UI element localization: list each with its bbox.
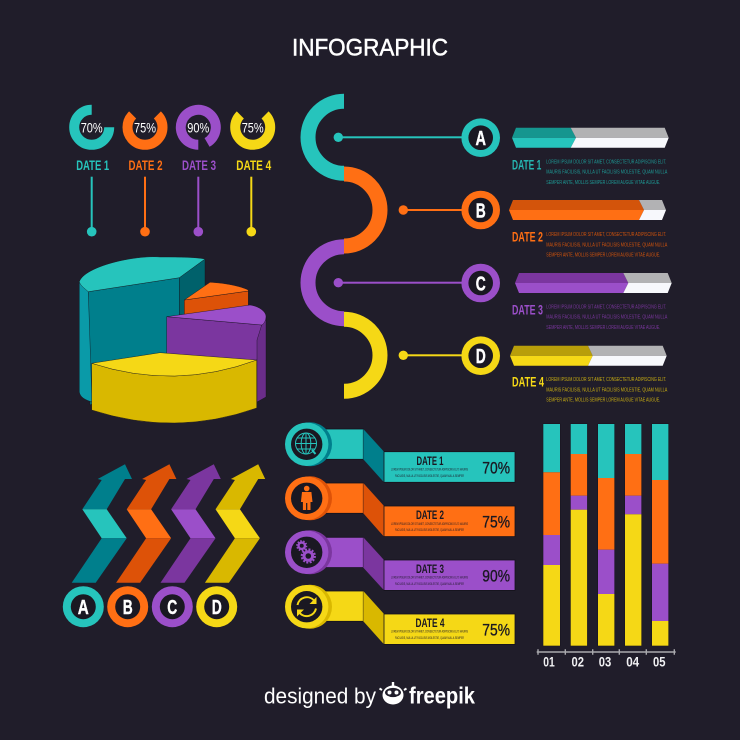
arrow A [72, 464, 132, 583]
chart: 3D pie [79, 257, 266, 423]
ribbon row 3: DATE 3 [416, 562, 444, 576]
badge A: A [78, 597, 89, 619]
text block B: SEMPER ANTE, MOLLIS SEMPER LOREM AUGUE VITAE AUGUE. [546, 253, 660, 259]
node A [461, 118, 500, 157]
ribbon row 1: LOREM IPSUM DOLOR SIT AMET, CONSECTETUR ADIPISCING ELIT. MAURIS [391, 468, 468, 472]
bar 02 [571, 424, 587, 646]
panel: progress bars [509, 128, 672, 404]
ribbon row 4 [285, 585, 515, 644]
footer credit: freepik [409, 682, 475, 708]
node D: D [476, 346, 486, 368]
bar 04 [625, 424, 641, 646]
text block B: LOREM IPSUM DOLOR SIT AMET, CONSECTETUR ADIPISCING ELIT. [546, 232, 666, 238]
icon: person [301, 486, 312, 510]
text block D: LOREM IPSUM DOLOR SIT AMET, CONSECTETUR ADIPISCING ELIT. [546, 377, 666, 383]
node A: A [475, 128, 486, 150]
node C [461, 264, 500, 302]
arrow D [205, 464, 265, 583]
yellow slice [92, 353, 257, 423]
badge A [63, 586, 104, 627]
badge B [107, 586, 148, 627]
ribbon row 2: LOREM IPSUM DOLOR SIT AMET, CONSECTETUR ADIPISCING ELIT. MAURIS [391, 522, 468, 526]
curve orange [344, 174, 380, 246]
text block C: SEMPER ANTE, MOLLIS SEMPER LOREM AUGUE VITAE AUGUE. [546, 325, 660, 331]
donut 75% orange [128, 115, 163, 236]
text block D: SEMPER ANTE, MOLLIS SEMPER LOREM AUGUE VITAE AUGUE. [546, 398, 660, 404]
ribbon row 1: 70% [482, 458, 510, 477]
text block D: MAURIS FACILISIS, NULLA UT FACILISIS MOLESTIE, QUAM NULLA [546, 387, 668, 393]
title: INFOGRAPHIC [292, 34, 448, 62]
progress bar C [515, 273, 672, 293]
bar 01 [543, 424, 560, 646]
curve purple [308, 247, 344, 319]
ribbon row 2 [285, 476, 515, 537]
progress bar B [509, 200, 666, 220]
node C: C [476, 273, 486, 295]
text block A: SEMPER ANTE, MOLLIS SEMPER LOREM AUGUE VITAE AUGUE. [546, 180, 660, 186]
ribbon row 2: FACILISIS, NULLA UT FACILISIS MOLESTIE, QUAM NULLA SEMPER [395, 528, 464, 532]
text block C: DATE 3 [512, 301, 543, 317]
ribbon row 3: 90% [482, 566, 510, 585]
ribbon row 4: FACILISIS, NULLA UT FACILISIS MOLESTIE, QUAM NULLA SEMPER [395, 636, 464, 640]
ribbon row 1: DATE 1 [416, 454, 444, 468]
icon: globe [296, 433, 316, 454]
bar 05 [652, 424, 668, 646]
node D [461, 336, 500, 375]
node B: B [476, 200, 486, 222]
chart: stacked bars [537, 424, 676, 670]
panel: donut percentages [74, 110, 271, 236]
badge C [152, 586, 193, 627]
ribbon row 4: DATE 4 [416, 616, 445, 630]
text block A: DATE 1 [512, 156, 541, 172]
donut 70%: 70% [81, 120, 103, 136]
axis labels: 02 [571, 654, 584, 670]
donut 90%: DATE 3 [182, 157, 216, 173]
badge D [196, 586, 237, 627]
arrow C [160, 464, 221, 583]
axis labels: 04 [626, 654, 639, 670]
text block A [512, 156, 668, 186]
curve yellow [344, 319, 380, 391]
orange slice [184, 282, 248, 316]
ribbon row 3: FACILISIS, NULLA UT FACILISIS MOLESTIE, QUAM NULLA SEMPER [395, 582, 464, 586]
axis labels: 03 [599, 654, 611, 670]
icon: gears [297, 541, 315, 563]
footer credit: designed by [264, 684, 376, 708]
text block A: MAURIS FACILISIS, NULLA UT FACILISIS MOLESTIE, QUAM NULLA [546, 170, 668, 176]
donut 75% yellow [235, 115, 271, 236]
axis labels: 01 [543, 654, 555, 670]
text block C [512, 301, 668, 331]
axis labels [543, 654, 666, 670]
axis [537, 649, 676, 655]
ribbon row 2: 75% [482, 512, 510, 531]
donut 70%: DATE 1 [76, 157, 109, 173]
text block D: DATE 4 [512, 374, 544, 390]
arrow B [116, 464, 176, 583]
axis labels: 05 [653, 654, 666, 670]
icon: refresh arrows [297, 597, 316, 616]
text block B: MAURIS FACILISIS, NULLA UT FACILISIS MOLESTIE, QUAM NULLA [546, 242, 668, 248]
donut 90% [181, 110, 216, 236]
progress bar A [512, 128, 669, 148]
teal slice [79, 257, 205, 405]
panel: icon ribbon list [285, 422, 515, 644]
text block A: LOREM IPSUM DOLOR SIT AMET, CONSECTETUR ADIPISCING ELIT. [546, 159, 666, 165]
ribbon row 1: FACILISIS, NULLA UT FACILISIS MOLESTIE, QUAM NULLA SEMPER [395, 474, 464, 478]
node B [461, 191, 500, 229]
panel: S-curve connector [308, 101, 500, 391]
footer credit [264, 682, 475, 708]
donut 75% orange: 75% [134, 120, 156, 136]
text block C: LOREM IPSUM DOLOR SIT AMET, CONSECTETUR ADIPISCING ELIT. [546, 304, 666, 310]
ribbon row 4: LOREM IPSUM DOLOR SIT AMET, CONSECTETUR ADIPISCING ELIT. MAURIS [391, 630, 468, 634]
connector D [399, 351, 463, 360]
purple slice [167, 305, 266, 402]
text block B: DATE 2 [512, 229, 543, 245]
ribbon row 3: LOREM IPSUM DOLOR SIT AMET, CONSECTETUR ADIPISCING ELIT. MAURIS [391, 576, 468, 580]
text block B [512, 229, 668, 259]
badge B: B [123, 597, 133, 619]
text block D [512, 374, 668, 404]
badge D: D [212, 597, 222, 619]
text block C: MAURIS FACILISIS, NULLA UT FACILISIS MOLESTIE, QUAM NULLA [546, 315, 668, 321]
connector C [334, 278, 463, 287]
progress bar D [510, 346, 667, 366]
donut 75% yellow: 75% [242, 120, 264, 136]
ribbon row 2: DATE 2 [416, 508, 444, 522]
ribbon row 1 [285, 422, 515, 482]
donut 75% orange: DATE 2 [128, 157, 163, 173]
icon: freepik logo [380, 682, 406, 704]
donut 90%: 90% [187, 120, 209, 136]
connector B [399, 205, 463, 215]
badge C: C [167, 597, 177, 619]
curve teal [308, 101, 344, 173]
donut 75% yellow: DATE 4 [236, 157, 271, 173]
donut 70% [74, 110, 109, 236]
connector A [334, 133, 463, 142]
bar 03 [598, 424, 614, 646]
panel: chevron arrows [63, 464, 265, 627]
ribbon row 3 [285, 530, 515, 590]
ribbon row 4: 75% [482, 620, 510, 639]
